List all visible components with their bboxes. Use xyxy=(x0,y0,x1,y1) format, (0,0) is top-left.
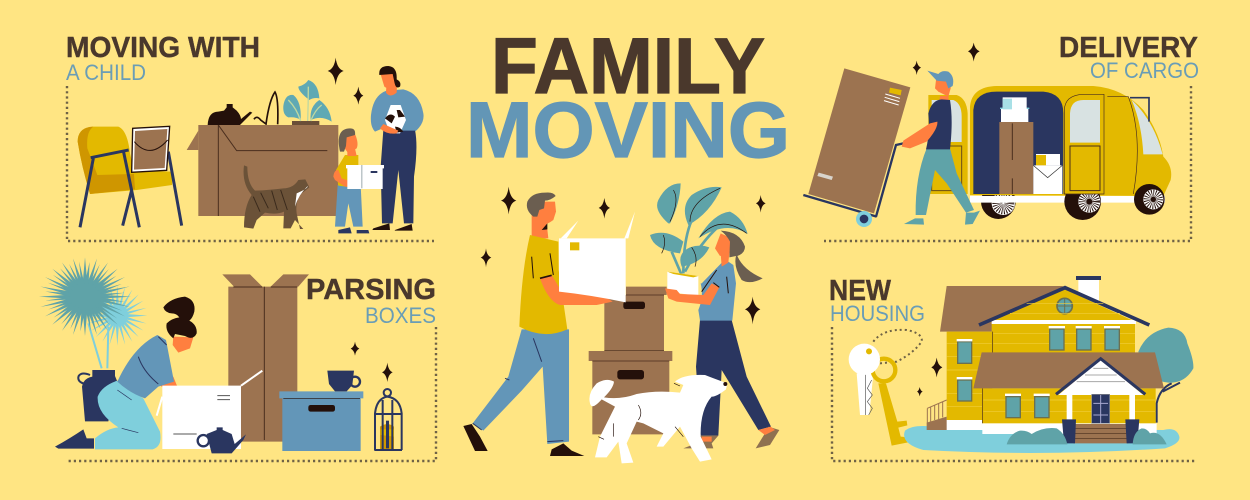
title xyxy=(466,21,790,174)
heading: new housing: NEW xyxy=(829,275,891,307)
icon: tall box xyxy=(222,274,309,442)
icon: cat xyxy=(244,165,309,229)
icon: white box held by man xyxy=(559,212,635,302)
panel: delivery of cargo xyxy=(803,43,1171,227)
icon: van xyxy=(928,86,1171,220)
heading: parsing boxes xyxy=(306,274,436,328)
icon: lamp xyxy=(254,92,278,124)
icon: open white box xyxy=(157,371,262,449)
panel: couple carrying boxes xyxy=(463,183,779,463)
heading: parsing boxes: BOXES xyxy=(365,303,436,328)
icon: tree xyxy=(1138,328,1193,423)
figure: mother xyxy=(371,66,424,231)
icon: boxes in van xyxy=(999,97,1062,194)
icon: key xyxy=(849,330,922,446)
icon: cardboard box xyxy=(187,125,338,216)
figure: white dog xyxy=(589,375,727,463)
icon: blue box xyxy=(279,391,363,451)
icon: mirror xyxy=(132,126,170,172)
heading: moving with a child: A CHILD xyxy=(66,60,146,85)
icon: sparkles xyxy=(481,187,766,324)
icon: palm plant xyxy=(39,257,147,368)
icon: hand truck with box xyxy=(803,68,910,227)
heading: moving with a child xyxy=(66,32,260,85)
icon: cup xyxy=(327,371,360,391)
icon: sparkle medium xyxy=(382,363,393,382)
figure: woman xyxy=(665,231,779,448)
title: MOVING xyxy=(466,85,790,174)
panel: parsing boxes xyxy=(39,257,402,453)
icon: bushes xyxy=(1007,428,1167,444)
heading: moving with a child: MOVING WITH xyxy=(66,32,260,64)
icon: lantern cage xyxy=(374,389,402,450)
icon: potted plant xyxy=(283,80,332,125)
icon: big plant xyxy=(650,183,748,296)
icon: stacked boxes xyxy=(589,287,672,434)
heading: new housing: HOUSING xyxy=(830,301,925,326)
icon: house xyxy=(927,276,1164,443)
icon: vase xyxy=(78,370,117,421)
icon: white storage box xyxy=(346,165,384,189)
heading: delivery of cargo xyxy=(1059,32,1199,83)
icon: lawn xyxy=(904,426,1179,453)
icon: sparkle small xyxy=(351,342,359,356)
icon: sparkle small xyxy=(353,87,363,105)
heading: delivery of cargo: DELIVERY xyxy=(1059,32,1198,64)
heading: new housing xyxy=(829,275,925,326)
icon: armchair xyxy=(78,127,182,227)
icon: sparkles xyxy=(913,43,980,75)
icon: sparkle large xyxy=(328,58,344,85)
icon: sparkles xyxy=(917,358,942,396)
figure: man xyxy=(463,192,613,456)
heading: delivery of cargo: OF CARGO xyxy=(1090,58,1199,83)
heading: parsing boxes: PARSING xyxy=(306,274,436,306)
figure: delivery man xyxy=(902,71,980,225)
figure: child xyxy=(333,128,369,233)
icon: teapot on box xyxy=(208,104,252,125)
panel: new housing xyxy=(849,276,1193,453)
title: FAMILY xyxy=(491,21,765,110)
icon: navy teapot xyxy=(198,427,246,453)
panel: moving with a child xyxy=(78,58,424,233)
figure: kneeling woman xyxy=(55,297,197,449)
